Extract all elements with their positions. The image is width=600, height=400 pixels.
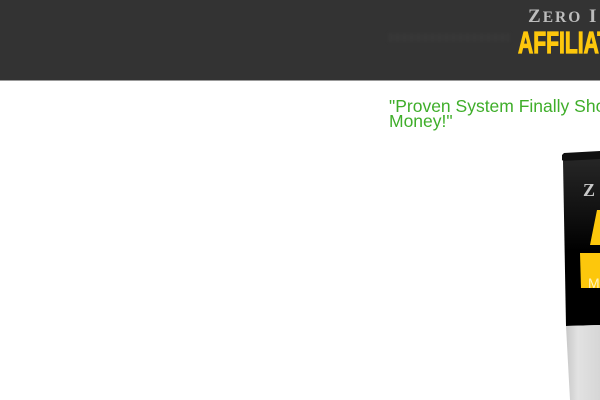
product box [562,151,600,400]
box top lid [562,151,600,163]
logo line: Zero: ZERO I [528,6,598,27]
box white lower front [566,325,600,400]
faint tagline bar [388,33,510,42]
headline: Money!" [389,111,453,131]
header banner [0,0,600,81]
box title M [580,253,600,288]
headline [389,99,600,131]
box letter Z: Z [583,180,595,200]
box black front [563,159,600,326]
box title A [590,210,600,245]
box title M glyph: M [588,275,600,291]
